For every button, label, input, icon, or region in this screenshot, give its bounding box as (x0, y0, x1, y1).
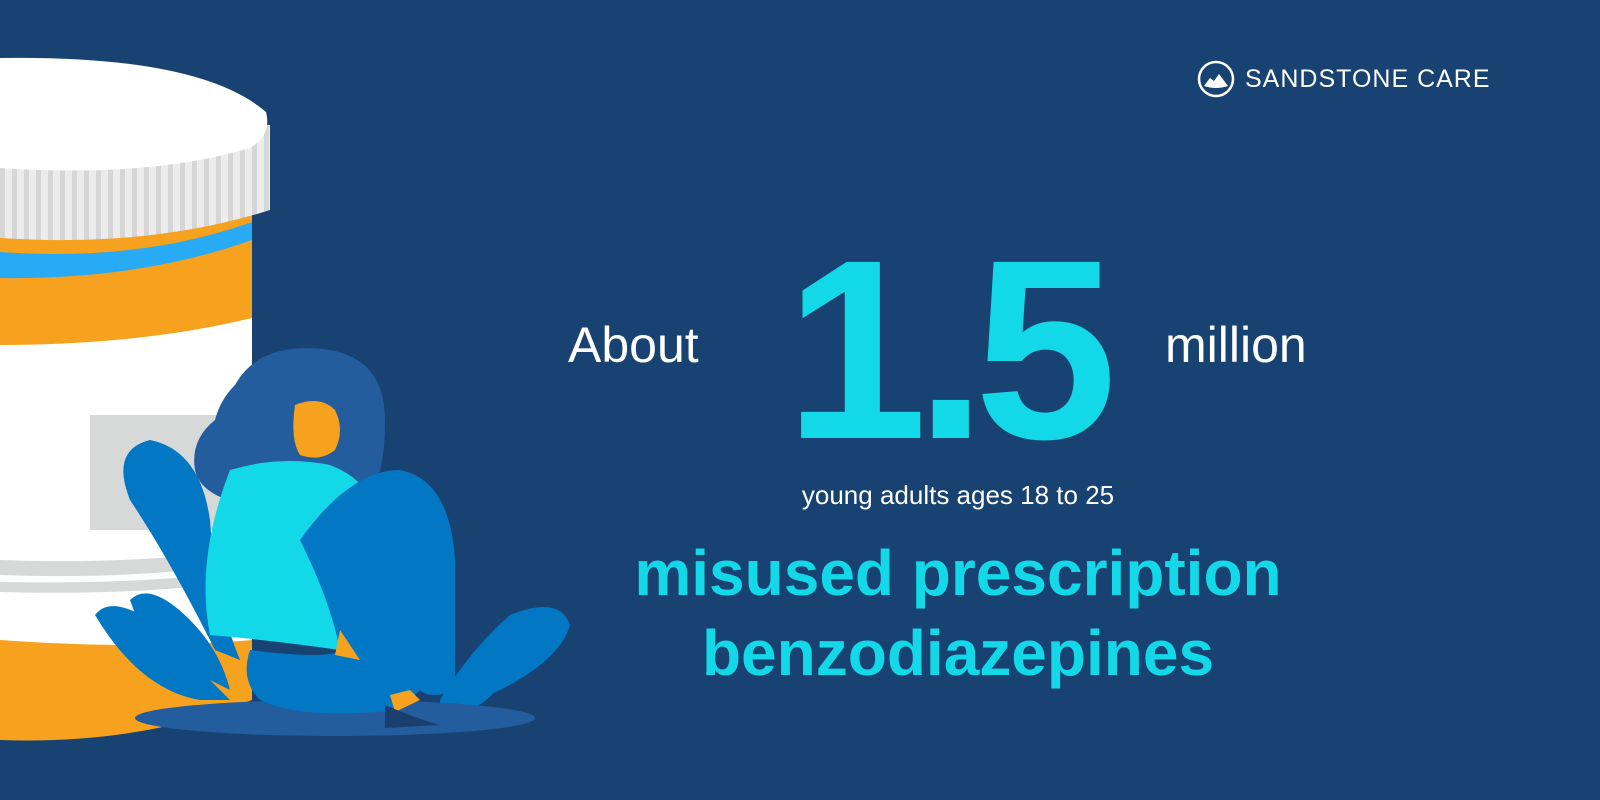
big number 1.5: 1.5 (785, 207, 1105, 493)
illustration: pill bottle and sitting woman (0, 58, 570, 740)
logo: Sandstone Care (1198, 60, 1491, 98)
headline: benzodiazepines (702, 617, 1214, 689)
headline (634, 537, 1282, 689)
text: About: About (568, 317, 699, 373)
woman (194, 348, 455, 728)
logo: Sandstone Care: SANDSTONE CARE (1245, 64, 1491, 92)
subtitle: young adults ages 18 to 25 (802, 480, 1114, 510)
pill bottle (0, 58, 270, 741)
icon: mountain circle (1198, 60, 1234, 98)
plants (95, 440, 570, 710)
shadow (135, 700, 535, 736)
headline: misused prescription (634, 537, 1282, 609)
text: million: million (1165, 317, 1307, 373)
